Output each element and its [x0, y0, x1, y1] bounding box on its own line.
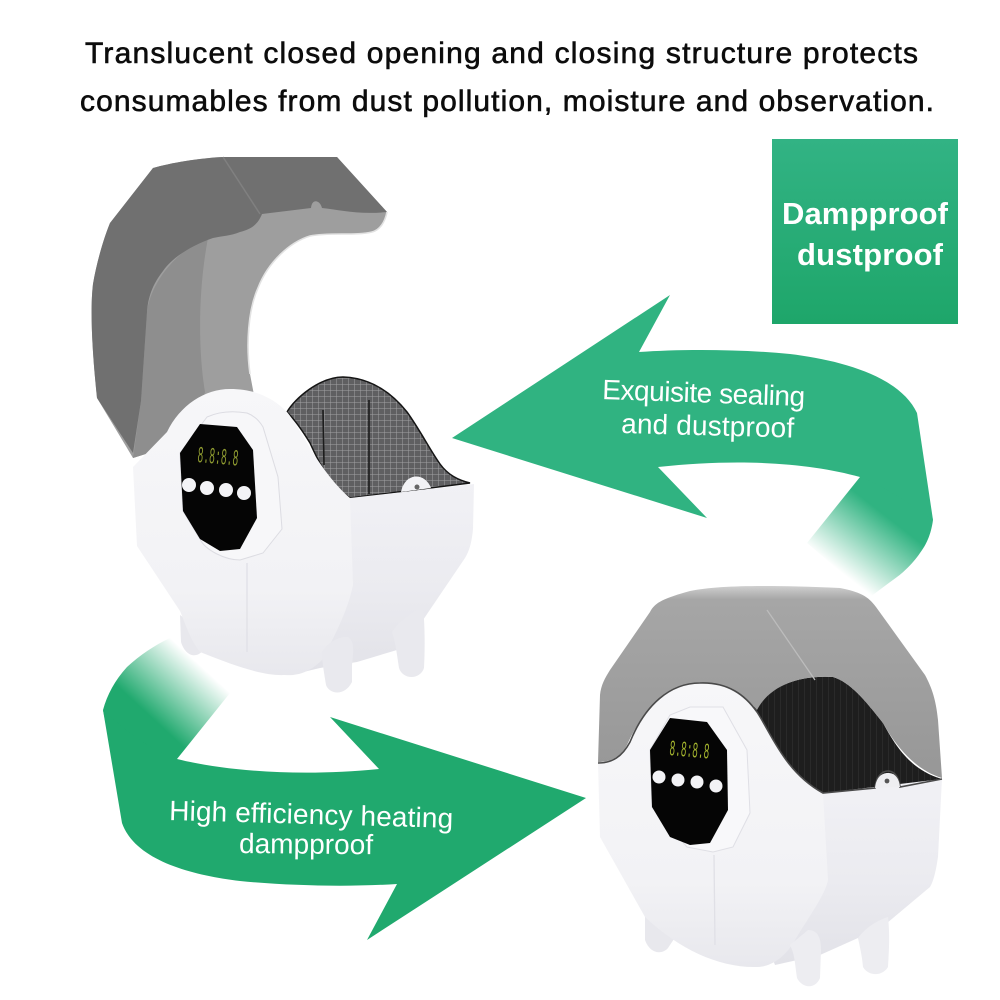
panel: dampproof dustproof badge [772, 139, 958, 324]
arrow label: exquisite sealing [602, 374, 806, 444]
title [80, 37, 934, 118]
title: Translucent closed opening and closing structure protects [85, 37, 918, 70]
left foot [645, 915, 680, 952]
lid, closed [598, 586, 942, 778]
product: closed device [598, 586, 942, 986]
arrow label: exquisite sealing: and dustproof [621, 408, 795, 444]
buttons [652, 770, 722, 792]
seam line [598, 683, 942, 793]
panel: dampproof dustproof badge: dustproof [797, 237, 944, 272]
arrow: lower, pointing right [103, 638, 586, 940]
front body [598, 683, 828, 967]
lid, open [92, 157, 387, 458]
arrow label: high efficiency heating [169, 795, 454, 860]
display panel: 8.8:8.8 [196, 443, 239, 473]
arrow label: high efficiency heating: dampproof [239, 828, 373, 860]
foil window [750, 677, 942, 793]
arrow label: high efficiency heating: High efficiency heating [169, 795, 454, 834]
rear body side [750, 778, 942, 965]
arrow: upper, pointing left [452, 295, 933, 597]
display panel [650, 707, 750, 852]
display panel [180, 412, 282, 560]
arrow label: exquisite sealing: Exquisite sealing [602, 374, 806, 412]
left foot [180, 615, 215, 655]
mounting tab [875, 773, 900, 788]
product: open device [92, 157, 474, 693]
feet [322, 607, 425, 693]
front body [133, 389, 353, 675]
rear body side [280, 484, 474, 674]
title: consumables from dust pollution, moisture and observation. [80, 85, 934, 118]
panel: dampproof dustproof badge: Dampproof [782, 196, 949, 231]
front seam line [246, 563, 248, 652]
foil liner [287, 377, 470, 498]
feet [790, 917, 889, 986]
mounting tab [401, 476, 431, 492]
display panel: 8.8:8.8 [668, 737, 710, 765]
buttons [182, 478, 251, 500]
front seam line [714, 855, 715, 945]
